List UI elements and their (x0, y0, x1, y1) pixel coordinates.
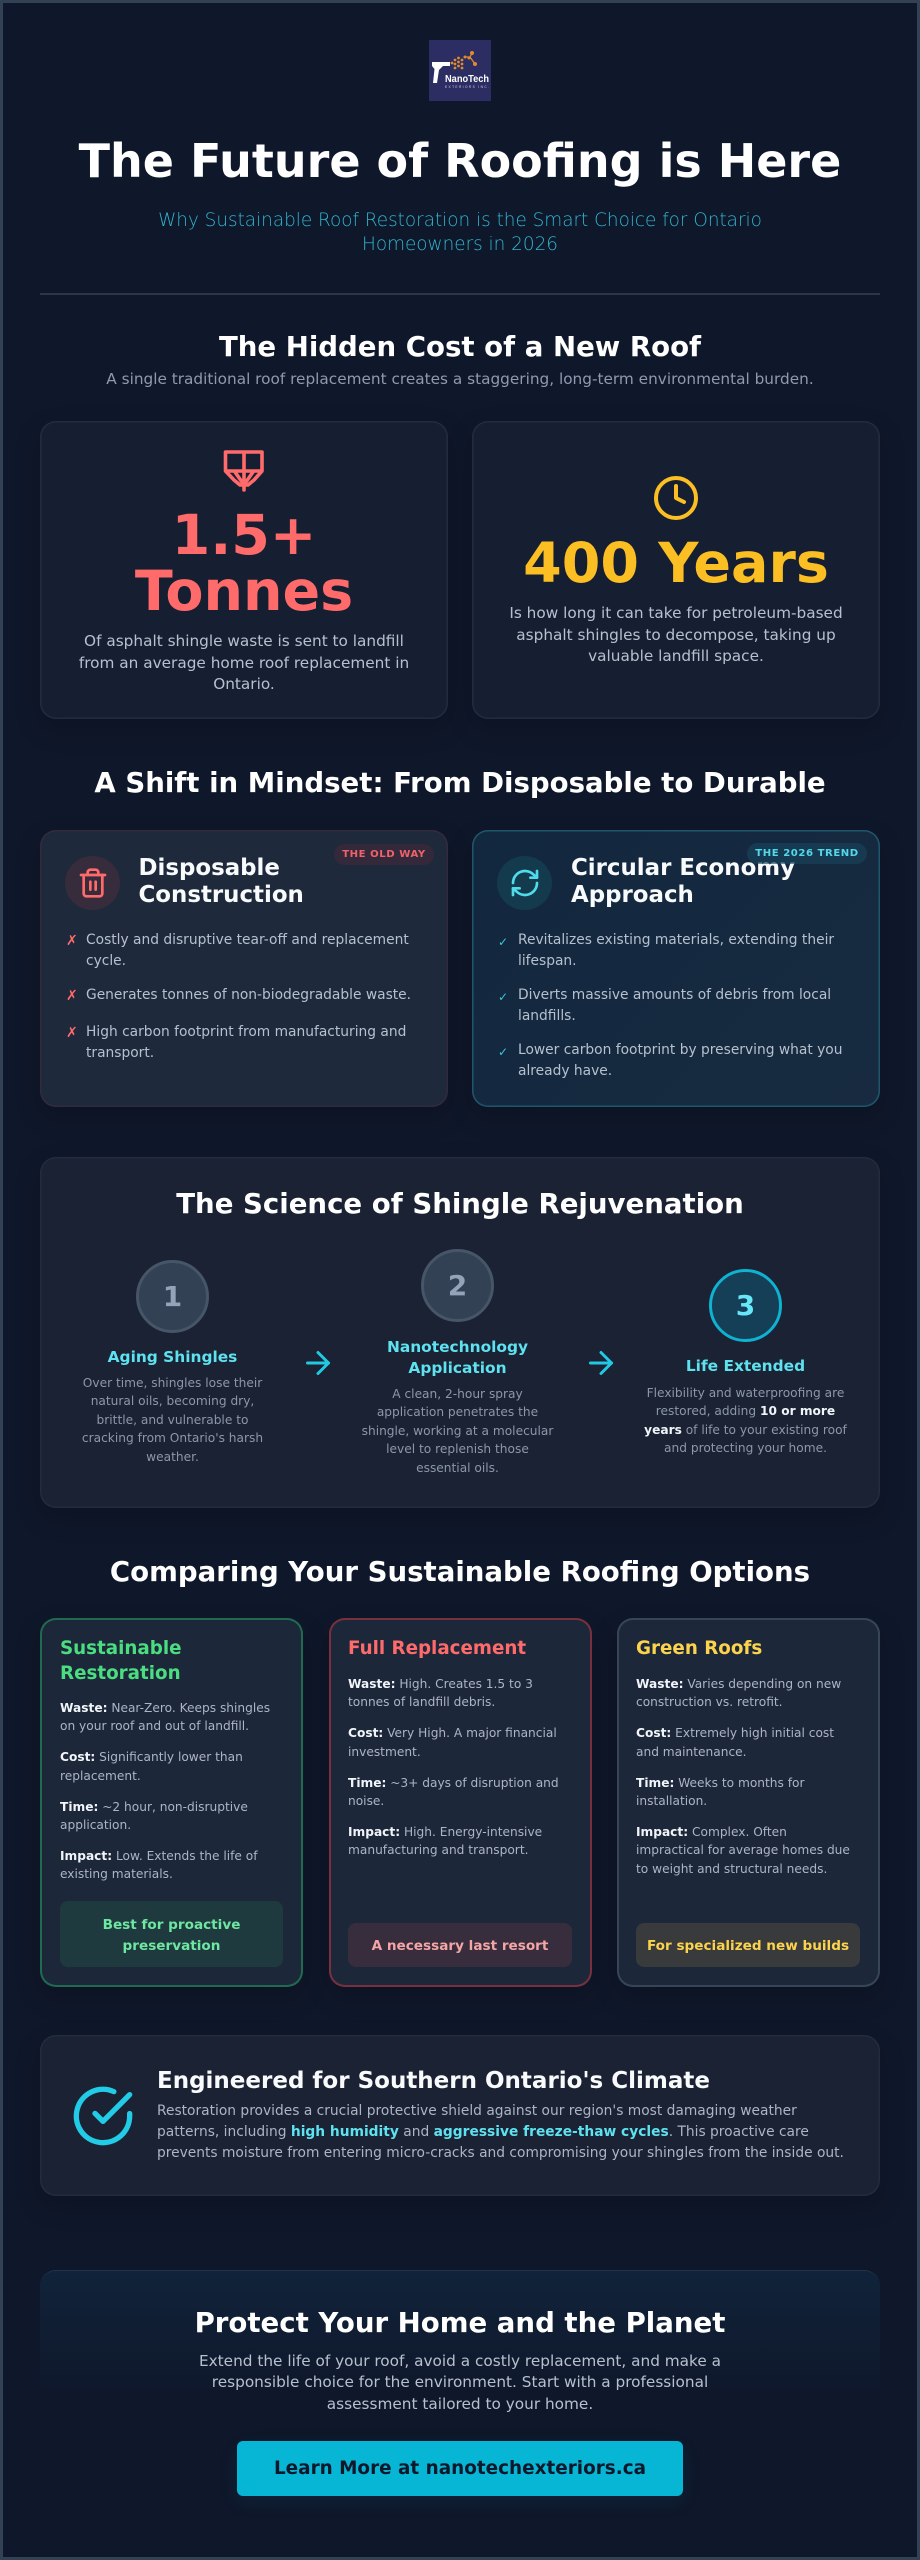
option details: Time: ~2 hour, non-disruptive (60, 1800, 248, 1814)
step description: brittle, and vulnerable to (97, 1413, 248, 1427)
heading: The Science of Shingle Rejuvenation (176, 1186, 744, 1220)
callout text: Restoration provides a crucial protective shield against our region's most damaging weather (157, 2102, 797, 2118)
list: Diverts massive amounts of debris from local (518, 987, 831, 1003)
option details: manufacturing and transport. (348, 1843, 528, 1857)
list (498, 932, 842, 1079)
step description (82, 1376, 263, 1464)
verdict (348, 1923, 572, 1967)
heading: shift in mindset: A Shift in Mindset: From Disposable to Durable (94, 766, 826, 799)
verdict (636, 1923, 860, 1967)
list (66, 932, 411, 1061)
list: landfills. (518, 1008, 576, 1024)
badge: the 2026 trend: THE 2026 TREND (755, 848, 859, 859)
button: Learn More at nanotechexteriors.ca (274, 2458, 646, 2478)
panel: full replacement (329, 1618, 592, 1987)
step description: shingle, working at a molecular (362, 1424, 553, 1438)
step description (644, 1386, 847, 1455)
panel: climate callout (40, 2035, 880, 2196)
cta text: assessment tailored to your home. (327, 2395, 593, 2413)
card heading (571, 854, 795, 908)
step number 3 (709, 1269, 782, 1342)
badge: the 2026 trend (747, 843, 867, 864)
option details: Impact: Low. Extends the life of (60, 1849, 258, 1863)
list: lifespan. (518, 953, 577, 969)
step description: years of life to your existing roof (644, 1423, 847, 1437)
list: cycle. (86, 953, 126, 969)
step title: Aging Shingles (108, 1348, 237, 1366)
step title: Life Extended (686, 1357, 805, 1375)
option title: Restoration (60, 1662, 181, 1684)
step description: A clean, 2-hour spray (392, 1387, 523, 1401)
stat description: Of asphalt shingle waste is sent to landfill (84, 632, 404, 650)
option details: to weight and structural needs. (636, 1862, 827, 1876)
stat description: from an average home roof replacement in (79, 654, 409, 672)
option title: Full Replacement (348, 1638, 526, 1659)
logo: NanoTech (445, 73, 489, 85)
stat description (509, 604, 843, 665)
option details: Impact: Complex. Often (636, 1825, 787, 1839)
button (237, 2440, 683, 2496)
option details: Cost: Very High. A major financial (348, 1726, 557, 1740)
icon: dumpster (224, 450, 264, 492)
step 3 (644, 1269, 847, 1455)
option details: investment. (348, 1745, 421, 1759)
subtitle (158, 210, 762, 255)
option details (636, 1677, 850, 1876)
step 2 (362, 1249, 554, 1475)
callout heading: Engineered for Southern Ontario's Climate (157, 2068, 710, 2094)
option title: Green Roofs (636, 1638, 762, 1659)
title: The Future of Roofing is Here (79, 134, 841, 188)
icon: clock (654, 476, 698, 520)
option details: noise. (348, 1794, 384, 1808)
step title: Application (408, 1359, 507, 1377)
list: ✓ (498, 1045, 508, 1059)
cta text (199, 2352, 721, 2413)
list: Generates tonnes of non-biodegradable waste. (86, 987, 411, 1003)
list: ✓ (498, 990, 508, 1004)
stat description: Ontario. (213, 675, 275, 693)
step number 2: 2 (448, 1269, 467, 1302)
step description: restored, adding 10 or more (656, 1404, 835, 1418)
cta heading: Protect Your Home and the Planet (195, 2306, 725, 2339)
section description: A single traditional roof replacement creates a staggering, long-term environmental burden. (106, 370, 814, 388)
option details: replacement. (60, 1769, 141, 1783)
step description: weather. (146, 1450, 199, 1464)
step description (362, 1387, 554, 1475)
option details: Waste: Near-Zero. Keeps shingles (60, 1701, 270, 1715)
callout text (157, 2102, 844, 2161)
option title (60, 1638, 182, 1684)
step number 2 (421, 1249, 494, 1322)
logo: EXTERIORS INC. (445, 85, 489, 89)
list: already have. (518, 1063, 612, 1079)
icon: check circle (74, 2086, 132, 2146)
panel: disposable construction (40, 830, 448, 1107)
step description: and protecting your home. (664, 1441, 827, 1455)
option details: Time: ~3+ days of disruption and (348, 1776, 559, 1790)
option details: impractical for average homes due (636, 1843, 850, 1857)
icon: refresh (497, 856, 552, 910)
stat description (79, 632, 409, 693)
step description: natural oils, becoming dry, (91, 1394, 254, 1408)
step number 1 (136, 1260, 209, 1333)
heading: the hidden cost: The Hidden Cost of a New Roof (219, 330, 701, 363)
option details (60, 1701, 270, 1881)
arrow (589, 1350, 614, 1376)
verdict: A necessary last resort (372, 1938, 548, 1954)
verdict: Best for proactive (103, 1917, 240, 1933)
verdict: preservation (123, 1938, 220, 1954)
cta text: responsible choice for the environment. Start with a professional (212, 2373, 708, 2391)
panel: sustainable restoration (40, 1618, 303, 1987)
stat description: asphalt shingles to decompose, taking up (516, 626, 836, 644)
list: ✗ (66, 933, 78, 949)
card heading: Construction (138, 882, 304, 908)
step description: level to replenish those (386, 1442, 529, 1456)
heading: comparing options: Comparing Your Sustainable Roofing Options (110, 1555, 810, 1588)
badge: the old way: THE OLD WAY (342, 849, 426, 860)
list: ✗ (66, 988, 78, 1004)
step number 1: 1 (163, 1280, 182, 1313)
list: High carbon footprint from manufacturing and (86, 1024, 406, 1040)
stat description: valuable landfill space. (588, 647, 764, 665)
list: Revitalizes existing materials, extending their (518, 932, 834, 948)
option details: application. (60, 1818, 131, 1832)
icon: trash (65, 856, 120, 910)
verdict (60, 1901, 283, 1967)
option details: Impact: High. Energy-intensive (348, 1825, 542, 1839)
card heading: Circular Economy (571, 854, 795, 880)
panel: circular economy (472, 830, 880, 1107)
list: ✓ (498, 935, 508, 949)
verdict: For specialized new builds (647, 1938, 849, 1954)
list: ✗ (66, 1025, 78, 1041)
list: Costly and disruptive tear-off and replacement (86, 932, 409, 948)
step 1 (82, 1260, 263, 1464)
option title: Sustainable (60, 1638, 182, 1659)
option details: Cost: Extremely high initial cost (636, 1726, 834, 1740)
logo (429, 40, 491, 101)
step description: essential oils. (416, 1461, 499, 1475)
option details: installation. (636, 1794, 707, 1808)
option details: Cost: Significantly lower than (60, 1750, 243, 1764)
step description: cracking from Ontario's harsh (82, 1431, 263, 1445)
card heading: Approach (571, 882, 694, 908)
step title: Nanotechnology (387, 1338, 528, 1356)
option details: and maintenance. (636, 1745, 747, 1759)
badge: the old way (334, 844, 434, 865)
list: transport. (86, 1045, 154, 1061)
step description: application penetrates the (377, 1405, 538, 1419)
option details: Waste: High. Creates 1.5 to 3 (348, 1677, 533, 1691)
arrow (306, 1350, 330, 1376)
option details: Waste: Varies depending on new (636, 1677, 841, 1691)
option details: Time: Weeks to months for (636, 1776, 804, 1790)
card heading (138, 854, 304, 908)
stat: 400 years: 400 Years (523, 531, 829, 596)
callout text: prevents moisture from entering micro-cracks and compromising your shingles from the inside out. (157, 2145, 844, 2161)
option details: on your roof and out of landfill. (60, 1719, 249, 1733)
cta text: Extend the life of your roof, avoid a costly replacement, and make a (199, 2352, 721, 2370)
panel: green roofs (617, 1618, 880, 1987)
option details: existing materials. (60, 1867, 173, 1881)
card heading: Disposable (138, 854, 280, 880)
stat description: Is how long it can take for petroleum-based (509, 604, 843, 622)
option details: construction vs. retrofit. (636, 1695, 783, 1709)
stat: 1.5+ tonnes (135, 503, 353, 624)
step description: Flexibility and waterproofing are (647, 1386, 844, 1400)
step number 3: 3 (736, 1289, 755, 1322)
subtitle: Homeowners in 2026 (362, 234, 558, 255)
panel: years stat (472, 421, 880, 719)
panel: call to action (40, 2270, 880, 2520)
option details: tonnes of landfill debris. (348, 1695, 495, 1709)
step title (387, 1338, 528, 1377)
subtitle: Why Sustainable Roof Restoration is the Smart Choice for Ontario (158, 210, 762, 231)
panel: science of rejuvenation (40, 1157, 880, 1508)
stat: 1.5+ tonnes: Tonnes (135, 559, 353, 624)
list: Lower carbon footprint by preserving what you (518, 1042, 842, 1058)
panel: tonnes stat (40, 421, 448, 719)
option details (348, 1677, 559, 1857)
callout text: patterns, including high humidity and aggressive freeze-thaw cycles. This proactive care (157, 2124, 809, 2140)
stat: 1.5+ tonnes: 1.5+ (172, 503, 316, 568)
step description: Over time, shingles lose their (83, 1376, 262, 1390)
